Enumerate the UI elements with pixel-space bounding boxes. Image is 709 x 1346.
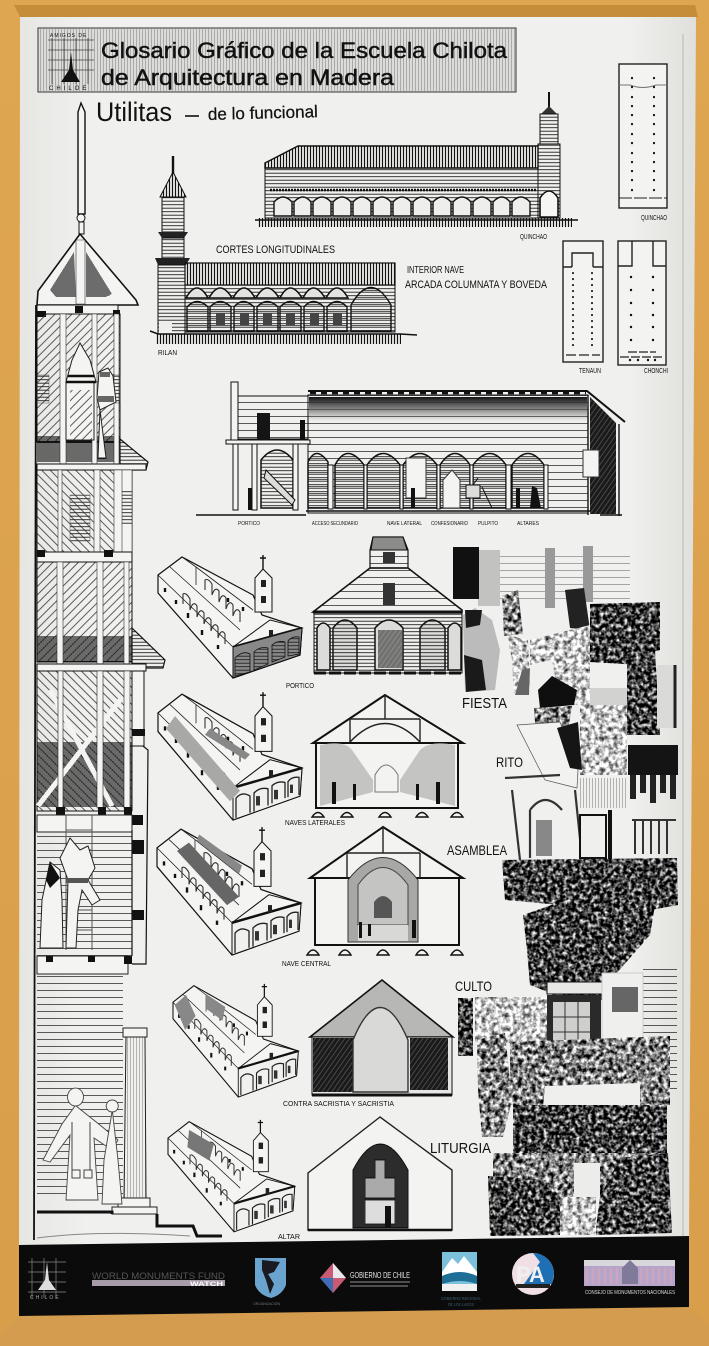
lattice	[580, 778, 627, 808]
labels	[238, 521, 539, 527]
classical column	[112, 1028, 157, 1214]
frame bottom rail	[0, 1307, 709, 1346]
organ	[628, 745, 678, 775]
handwritten subtitle: Utilitas	[96, 97, 172, 127]
cross section: naves laterales	[312, 695, 463, 817]
second tower level	[37, 470, 132, 562]
dancers	[502, 590, 523, 636]
title panel	[38, 28, 516, 92]
longitudinal section: Quinchao	[255, 92, 578, 241]
braced tower level	[37, 664, 146, 832]
upper arches	[186, 288, 348, 298]
logo: World Monuments Fund Watch: WORLD MONUMENTS FUND	[92, 1271, 226, 1281]
poster wall	[475, 997, 547, 1043]
church facade elevation	[313, 537, 462, 673]
logo: blue mountain	[441, 1252, 481, 1307]
logo: Consejo de Monumentos Nacionales: CONSEJO DE MONUMENTOS NACIONALES	[585, 1290, 675, 1296]
altar and confessional	[443, 470, 460, 508]
logo: round emblem	[512, 1253, 554, 1295]
footings	[312, 812, 463, 817]
vaulted interior view	[348, 858, 418, 942]
arcade	[261, 450, 544, 508]
floor beam	[226, 440, 310, 444]
label: NAVE CENTRAL	[282, 961, 331, 968]
logo: Amigos de Chiloe	[48, 33, 94, 92]
logo: blue mountain: GOBIERNO REGIONAL	[441, 1296, 481, 1301]
bell ringer	[97, 368, 116, 458]
white panel	[583, 450, 599, 477]
cross section: altar	[308, 1117, 452, 1230]
photo collage: fiesta	[453, 546, 660, 712]
altar	[513, 1105, 667, 1155]
roof cornice	[308, 391, 625, 422]
base siding wall	[37, 974, 123, 1200]
label: TENAUN	[579, 368, 601, 375]
narthex upper room	[231, 382, 308, 440]
floor plan: Tenaun	[563, 241, 603, 375]
board right margin line	[682, 34, 684, 1236]
small lean-to roof	[120, 439, 148, 470]
ground hatch	[258, 218, 572, 227]
label: cortes longitudinales: CORTES LONGITUDINALES	[216, 244, 335, 256]
middle	[493, 1153, 667, 1197]
photo collage: culto	[455, 967, 677, 1137]
title text: Glosario Gráfico de la Escuela Chilota	[101, 38, 508, 63]
cross section: sacristia	[283, 980, 453, 1108]
label: arcada columnata y boveda: ARCADA COLUMNATA Y BOVEDA	[405, 279, 548, 291]
plaid man	[477, 1033, 512, 1137]
shaded upper wall	[309, 397, 587, 421]
arcade band	[270, 189, 536, 191]
sponsors band	[19, 1236, 689, 1316]
label: QUINCHAO	[520, 234, 547, 241]
floor beam	[37, 464, 146, 470]
arcade	[274, 197, 530, 216]
label: RITO	[496, 754, 523, 770]
people at door	[565, 588, 590, 630]
large apse arch	[351, 288, 391, 331]
crowd right	[595, 1153, 672, 1235]
logo: blue mountain: DE LOS LAGOS	[448, 1302, 474, 1307]
crowd	[510, 1036, 670, 1105]
siding level with ladder and figures	[37, 746, 148, 974]
bell	[66, 343, 96, 440]
label: QUINCHAO	[641, 215, 667, 222]
tower	[155, 156, 190, 334]
altar cloth	[574, 1163, 600, 1197]
stone stepped base	[37, 1212, 222, 1236]
logo: World Monuments Fund Watch	[92, 1271, 226, 1288]
dark sacristy wall	[590, 397, 616, 514]
ground line	[37, 1233, 190, 1238]
logo: Amigos de Chiloe	[28, 1258, 66, 1301]
door and pillar	[478, 550, 500, 606]
label: ASAMBLEA	[447, 842, 508, 858]
axonometric church: altar	[168, 1120, 300, 1241]
title panel: de Arquitectura en Madera	[101, 65, 395, 90]
wall	[185, 285, 395, 332]
axonometric church: contra sacristia	[173, 984, 298, 1097]
handwritten subtitle: de lo funcional	[208, 102, 318, 124]
window	[547, 995, 601, 1050]
labels: ALTARES	[517, 521, 539, 527]
logo: shield map: ORGANIZACION	[253, 1302, 281, 1306]
logo: Amigos de Chiloe: CHILOE	[49, 86, 89, 92]
wall panels	[500, 553, 630, 605]
priest and attendant figures	[43, 1088, 122, 1204]
crowd left	[488, 1176, 560, 1236]
logo: World Monuments Fund Watch: WATCH	[190, 1281, 223, 1288]
logo: Gobierno de Chile	[320, 1263, 410, 1293]
tower	[538, 92, 560, 218]
side aisles	[320, 743, 373, 806]
cross section: nave central	[307, 827, 463, 955]
logo: shield map	[253, 1258, 286, 1306]
label: CULTO	[455, 978, 492, 994]
lower arches	[187, 302, 347, 331]
roof	[265, 146, 538, 168]
corridor	[550, 640, 590, 705]
tower roof	[37, 234, 138, 317]
label: NAVES LATERALES	[285, 820, 345, 827]
offering	[580, 705, 627, 775]
wall posts	[545, 546, 593, 608]
labels: CONFESIONARIO	[431, 521, 469, 527]
photo collage: arched building	[505, 775, 676, 860]
ground	[196, 511, 622, 515]
priest face	[534, 706, 572, 735]
flowers	[627, 650, 660, 735]
tall tower section drawing	[34, 103, 222, 1240]
woman	[40, 862, 63, 948]
label: PORTICO	[286, 683, 314, 690]
logo: Consejo de Monumentos Nacionales	[584, 1260, 675, 1296]
third tower level	[37, 562, 165, 668]
label: FIESTA	[462, 695, 507, 712]
nave wall	[308, 395, 588, 513]
center aisle	[560, 1197, 596, 1235]
longitudinal section: Rilán	[150, 156, 417, 357]
label: CONTRA SACRISTIA Y SACRISTIA	[283, 1101, 394, 1108]
frame top inner shadow	[14, 5, 698, 17]
label: LITURGIA	[430, 1140, 491, 1157]
windows	[216, 313, 342, 325]
labels: ACCESO SECUNDARIO	[312, 521, 359, 527]
tower spire	[77, 103, 85, 234]
logo: Amigos de Chiloe: AMIGOS DE	[50, 33, 87, 39]
silhouettes	[248, 486, 541, 510]
white sign with picture	[602, 973, 643, 1040]
label: ALTAR	[278, 1234, 300, 1241]
photo collage: rito	[496, 640, 678, 808]
upper vault band	[185, 263, 395, 285]
labels: PORTICO	[238, 521, 261, 527]
logo: round emblem: PA	[516, 1262, 545, 1287]
axonometric church: portico	[158, 555, 314, 690]
upper belfry with bell	[37, 314, 120, 466]
logo: Amigos de Chiloe: CHILOE	[30, 1295, 61, 1301]
floor plan: Chonchi	[618, 241, 668, 375]
tower outer wall line	[34, 305, 36, 1240]
logo: Gobierno de Chile: GOBIERNO DE CHILE	[350, 1271, 410, 1280]
footings	[307, 950, 463, 955]
ground hatch	[156, 334, 401, 344]
columns	[233, 444, 548, 510]
handwritten subtitle	[96, 97, 318, 127]
floor plan: Quinchao	[619, 64, 667, 222]
axonometric church: naves laterales	[158, 692, 345, 827]
label: CHONCHI	[644, 368, 668, 375]
white robe	[517, 722, 578, 788]
labels: NAVE LATERAL	[387, 521, 422, 527]
interior longitudinal section of nave	[196, 382, 625, 527]
priest hat	[538, 676, 577, 708]
axonometric church: nave central	[157, 827, 331, 968]
stair and pulpit	[264, 470, 492, 508]
group	[590, 602, 660, 665]
person at front	[463, 608, 500, 692]
wall	[265, 168, 538, 218]
siding	[643, 967, 677, 1092]
white cloth	[543, 1083, 640, 1107]
photo collage: asamblea	[447, 842, 678, 1000]
label: RILAN	[158, 350, 177, 357]
labels: PULPITO	[478, 521, 499, 527]
label: interior nave: INTERIOR NAVE	[407, 265, 464, 276]
man on ladder	[60, 838, 100, 948]
photo collage: liturgia	[430, 1105, 672, 1236]
